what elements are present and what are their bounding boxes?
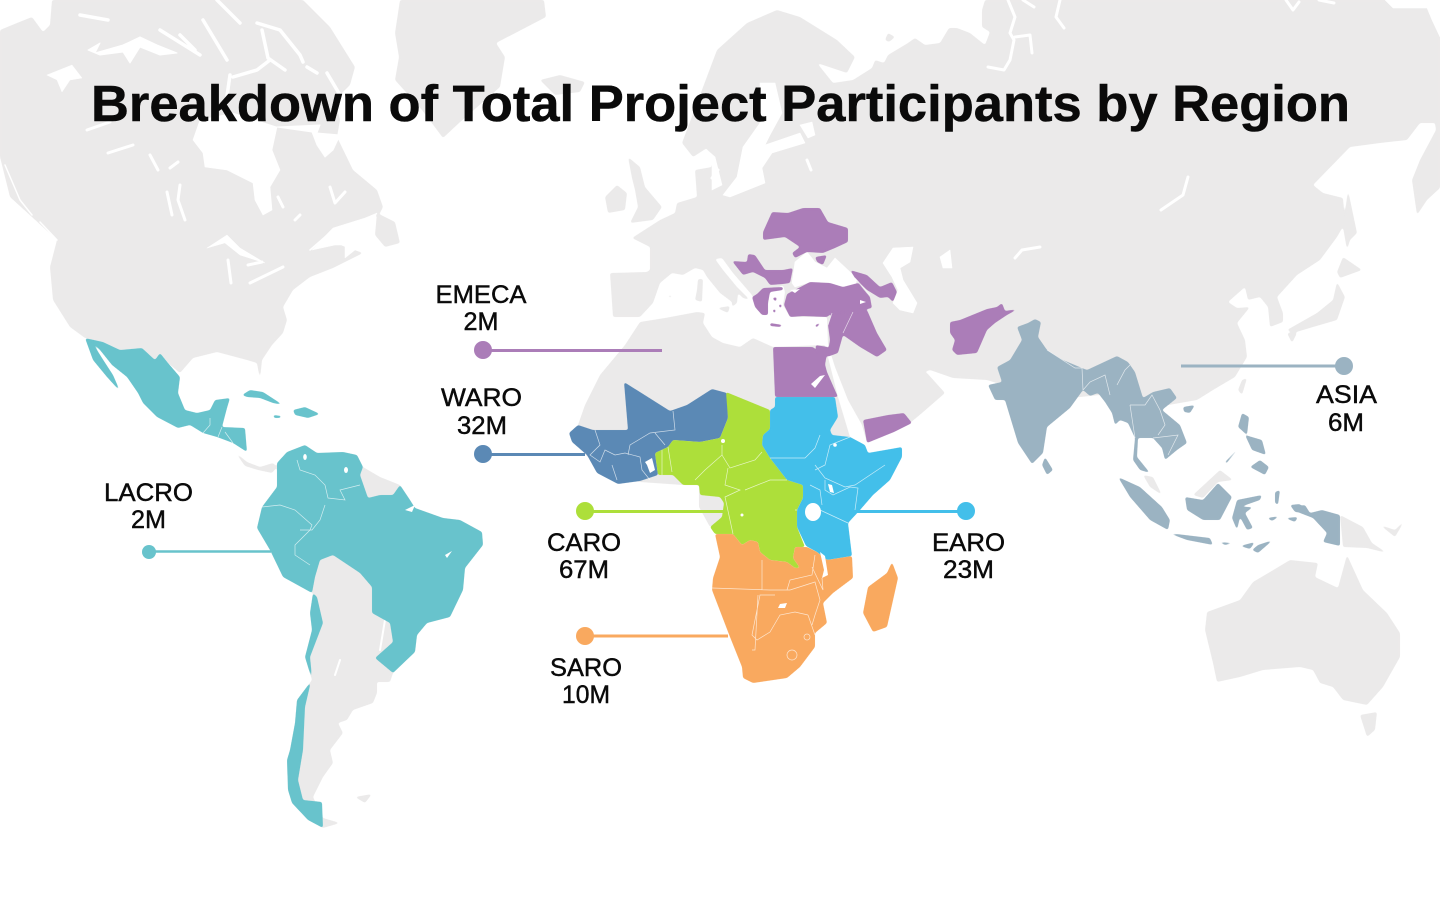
callout: WARO [441,384,585,463]
region: WARO countries [569,382,728,484]
callout: WARO: WARO [441,384,522,412]
callout: CARO: 67M [559,556,609,584]
callout: LACRO: LACRO [104,479,193,507]
callout: ASIA: ASIA [1316,381,1377,409]
callout: CARO: CARO [547,529,621,557]
Ukraine [763,208,848,258]
Balkans [732,254,793,285]
callout: CARO [547,502,724,584]
callout: EMECA: 2M [464,308,498,336]
water: arctic channels, lakes and inland seas [5,0,1440,675]
title: Breakdown of Total Project Participants by Region [91,75,1350,132]
callout: ASIA [1181,357,1377,437]
callout: EARO: 23M [943,556,994,584]
Aegean islands [772,297,782,314]
region: EARO countries [762,397,902,560]
Egypt [773,347,838,397]
Greece [752,287,783,315]
Crimea [815,255,827,265]
region: LACRO countries [85,338,483,828]
region: ASIA countries [988,319,1340,555]
Yemen [863,413,912,443]
region: CARO countries [655,392,805,568]
callout: SARO [550,627,728,709]
callout: ASIA: 6M [1328,409,1364,437]
callout: EMECA: EMECA [436,281,527,309]
Sinai [815,345,828,365]
Cyprus [815,322,822,328]
Levant and Iraq [827,310,887,357]
callout: EMECA [436,281,662,359]
callout: EARO: EARO [932,529,1005,557]
region: SARO countries [712,534,898,683]
Afghanistan [950,303,1018,355]
callout: SARO: 10M [562,681,610,709]
callout: WARO: 32M [457,412,507,440]
Crete [770,323,783,327]
callout: SARO: SARO [550,654,622,682]
region: EMECA countries [732,208,1018,443]
callout: LACRO: 2M [131,506,166,534]
Caucasus [850,270,897,302]
callout: LACRO [104,479,271,559]
callout: EARO [852,502,1005,584]
Turkey [784,282,872,317]
